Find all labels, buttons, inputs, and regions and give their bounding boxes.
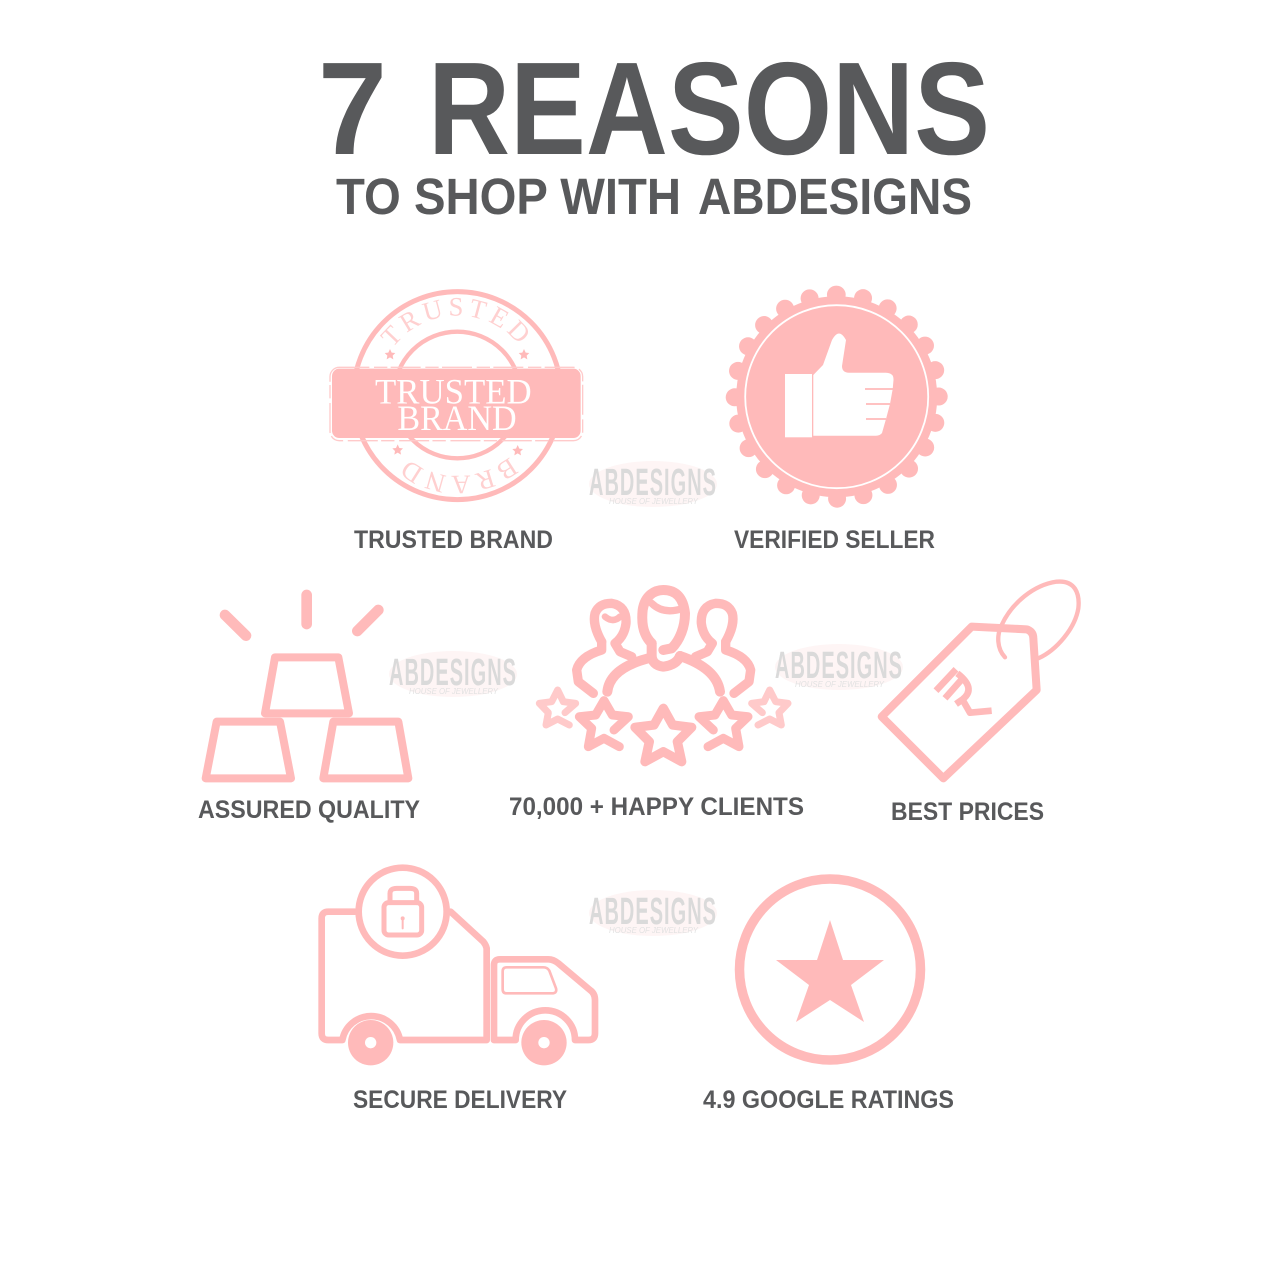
icon: gold bars [206, 595, 408, 778]
title: 7 [318, 35, 387, 182]
icon: trusted brand stamp [329, 289, 584, 502]
subtitle: TO SHOP WITH [336, 168, 681, 225]
label: secure delivery: SECURE DELIVERY [353, 1086, 567, 1114]
watermark: HOUSE OF JEWELLERY [795, 680, 885, 689]
watermark [389, 651, 517, 697]
watermark: HOUSE OF JEWELLERY [409, 687, 499, 696]
icon: happy clients with stars [539, 590, 788, 762]
label: verified seller: VERIFIED SELLER [734, 526, 935, 554]
watermark: ABDESIGNS [589, 462, 717, 504]
watermark: HOUSE OF JEWELLERY [609, 497, 699, 506]
subtitle [336, 168, 972, 225]
label: best prices: BEST PRICES [891, 798, 1044, 826]
icon: trusted brand stamp: BRAND [397, 398, 517, 438]
icon: trusted brand stamp: TRUSTED [375, 372, 532, 412]
title: REASONS [428, 35, 990, 182]
watermark [589, 890, 717, 936]
icon: google rating star [740, 879, 920, 1060]
label: assured quality: ASSURED QUALITY [198, 796, 420, 824]
watermark: ABDESIGNS [775, 645, 903, 687]
watermark: ABDESIGNS [589, 891, 717, 933]
label: trusted brand: TRUSTED BRAND [354, 526, 553, 554]
watermark [589, 461, 717, 507]
icon: trusted brand stamp: TRUSTED [380, 298, 528, 345]
icon: verified seller badge [735, 295, 939, 499]
icon: trusted brand stamp: BRAND [402, 458, 519, 494]
subtitle: ABDESIGNS [698, 168, 972, 225]
icon: secure delivery truck [322, 868, 595, 1065]
label: google ratings: 4.9 GOOGLE RATINGS [703, 1086, 954, 1114]
watermark: ABDESIGNS [389, 652, 517, 694]
watermark [775, 644, 903, 690]
icon: price tag with rupee [882, 582, 1079, 778]
label: happy clients: 70,000 + HAPPY CLIENTS [509, 793, 804, 821]
watermark: HOUSE OF JEWELLERY [609, 926, 699, 935]
